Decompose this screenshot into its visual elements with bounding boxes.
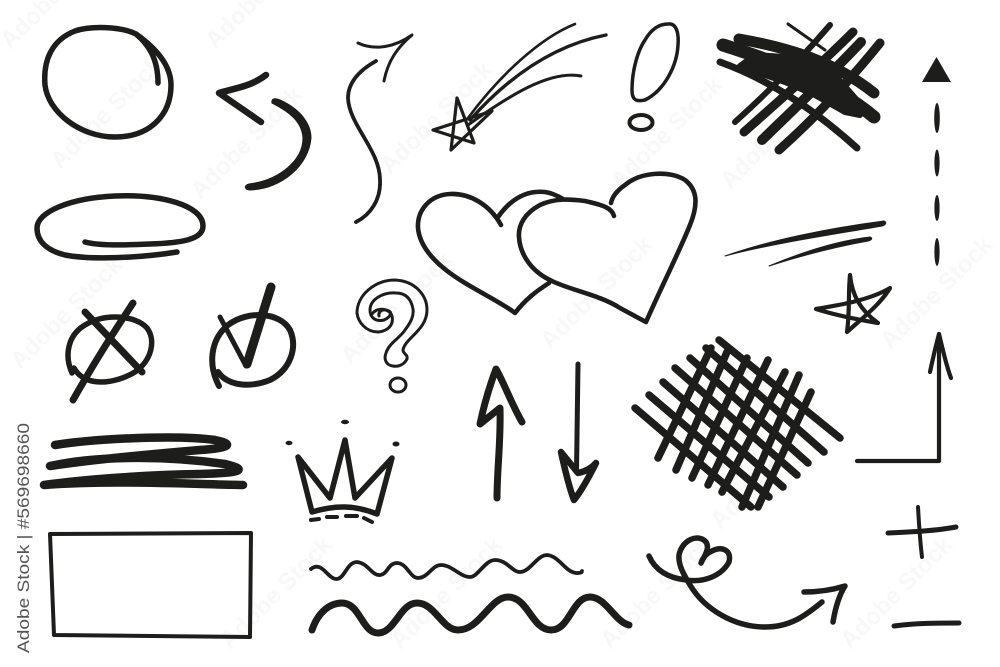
watermark pattern: Adobe Stock bbox=[185, 81, 308, 204]
watermark pattern: Adobe Stock bbox=[605, 71, 728, 194]
watermark pattern: Adobe Stock bbox=[875, 231, 998, 354]
crossed circle bbox=[68, 303, 152, 400]
checked circle bbox=[212, 287, 293, 386]
two speed lines bbox=[725, 221, 886, 266]
rectangle frame bbox=[50, 533, 251, 637]
watermark pattern: Adobe Stock bbox=[45, 51, 168, 174]
down arrow bbox=[561, 364, 596, 500]
watermark pattern: Adobe Stock bbox=[535, 231, 658, 354]
minus sign bbox=[894, 623, 959, 626]
dashed up arrow bbox=[922, 57, 951, 266]
scribble bars bbox=[44, 438, 243, 485]
plus sign bbox=[888, 507, 956, 557]
watermark pattern: Adobe Stock bbox=[335, 246, 458, 369]
crosshatch grid bbox=[635, 340, 840, 507]
scribble hatch bbox=[720, 24, 880, 150]
shooting star bbox=[433, 24, 606, 150]
stock id text: Adobe Stock | #569698660 bbox=[14, 423, 33, 653]
watermark pattern: Adobe Stock bbox=[595, 531, 718, 654]
exclamation mark bbox=[630, 24, 678, 130]
tall wavy arrow bbox=[348, 35, 412, 222]
circle doodle bbox=[45, 28, 171, 137]
watermark pattern: Adobe Stock bbox=[5, 251, 128, 374]
thick wave bbox=[312, 597, 629, 633]
question mark bbox=[357, 280, 427, 392]
watermark pattern: Adobe Stock bbox=[375, 56, 498, 179]
curved return arrow bbox=[219, 75, 311, 190]
watermark pattern: Adobe Stock bbox=[215, 531, 338, 654]
corner arrow bbox=[857, 334, 951, 461]
two hearts bbox=[418, 174, 695, 322]
small star bbox=[816, 275, 890, 332]
watermark pattern: Adobe Stock bbox=[385, 531, 508, 654]
watermark pattern: Adobe Stock bbox=[835, 531, 958, 654]
watermark pattern: Adobe Stock bbox=[715, 71, 838, 194]
crown bbox=[286, 420, 400, 522]
thin wave bbox=[311, 555, 582, 579]
oval doodle bbox=[37, 196, 203, 258]
loop heart arrow bbox=[649, 538, 845, 627]
watermark pattern: Adobe Stock bbox=[705, 411, 828, 534]
up arrow bbox=[480, 369, 522, 498]
